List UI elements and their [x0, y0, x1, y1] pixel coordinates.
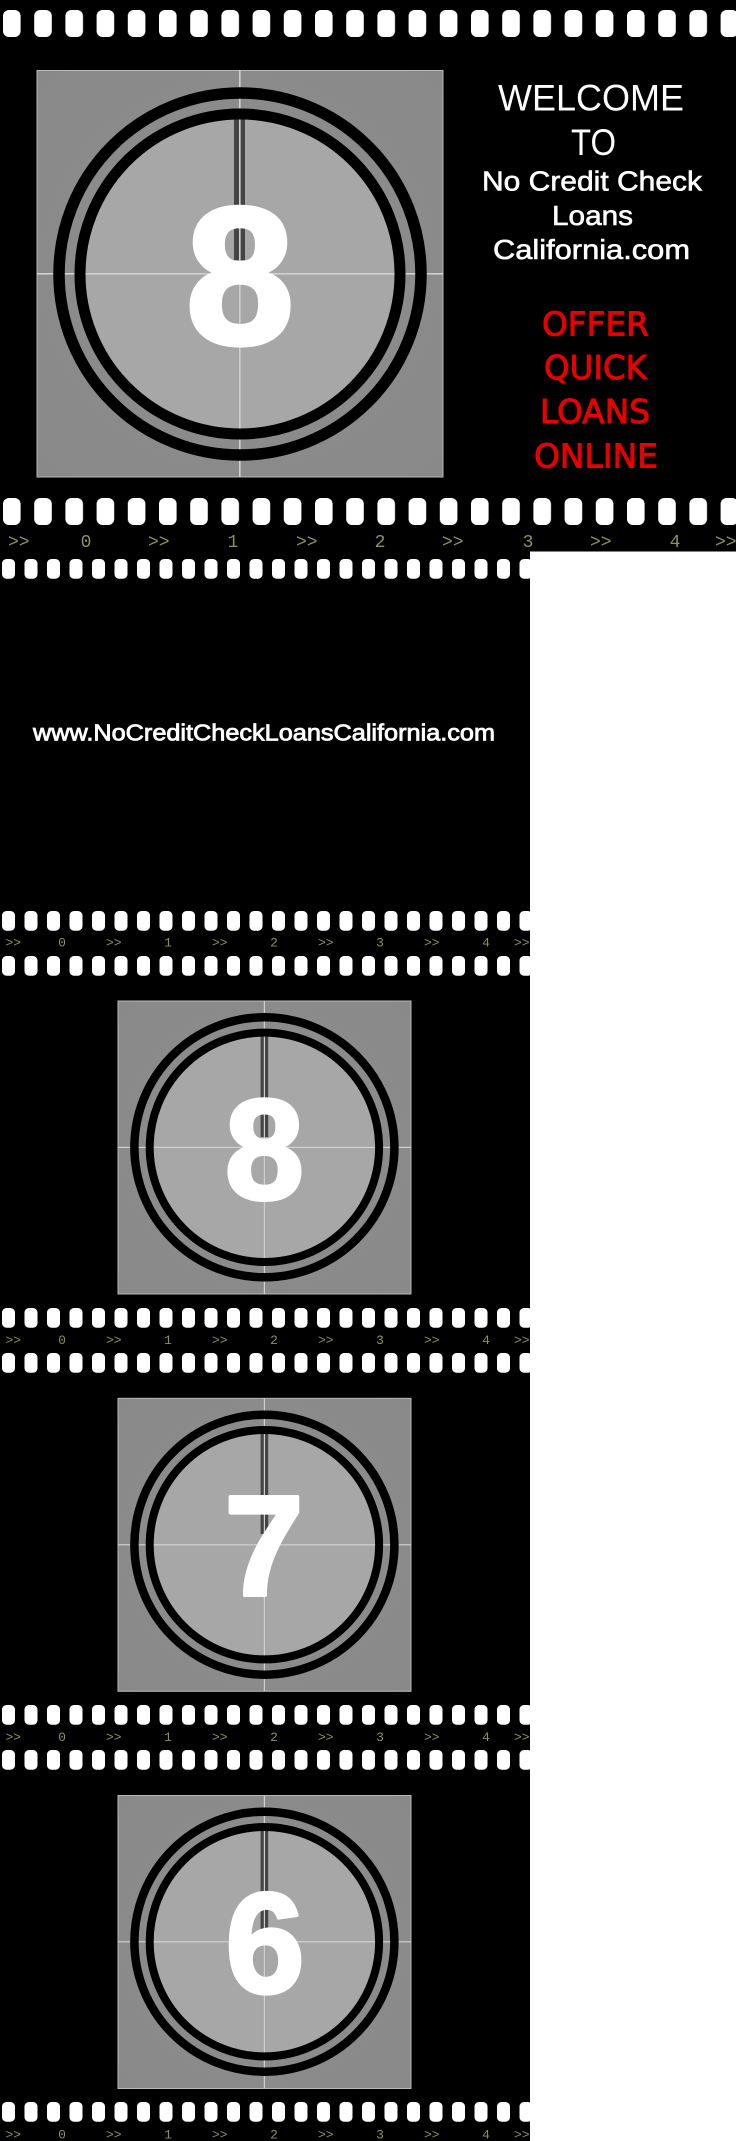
film strip: holes below ruler, frame 8 [0, 956, 530, 976]
red tagline: OFFER [542, 305, 649, 344]
ruler row: above frame 6: >> [318, 1730, 334, 1745]
film strip: holes above frame 7 [0, 1353, 530, 1373]
ruler row: above frame 8 [6, 936, 530, 950]
ruler row: top: >> [715, 533, 736, 553]
ruler row: above frame 7: 4 [482, 1333, 490, 1348]
ruler row: above frame 6: 2 [270, 1730, 278, 1745]
ruler row: above frame 6: 1 [164, 1730, 172, 1745]
ruler row: above frame 8: >> [514, 936, 530, 950]
ruler row: above frame 8: 1 [164, 936, 172, 950]
ruler row: above frame 8: >> [6, 936, 21, 950]
ruler row: above frame 7: >> [424, 1333, 440, 1348]
ruler row: above frame 7: >> [106, 1333, 122, 1348]
countdown dial: frame 7: 7 [224, 1467, 304, 1626]
red tagline: ONLINE [534, 437, 658, 476]
ruler row: above frame 7: >> [318, 1333, 334, 1348]
ruler row: above frame 7: 3 [376, 1333, 384, 1348]
ruler row: above frame 8: >> [106, 936, 122, 950]
ruler row: above frame 6: >> [6, 1730, 21, 1745]
ruler row: top: >> [442, 533, 464, 553]
welcome heading [482, 78, 702, 265]
ruler row: above frame 8: 2 [270, 936, 278, 950]
website address: www.NoCreditCheckLoansCalifornia.com [32, 720, 495, 746]
ruler row: above frame 6: 4 [482, 1730, 490, 1745]
ruler row: above frame 7: 0 [58, 1333, 66, 1348]
ruler row: above frame 8: 3 [376, 936, 384, 950]
ruler row: above frame 7 [6, 1333, 530, 1348]
film strip: bottom holes [0, 2102, 530, 2122]
film strip: holes above frame 8 [0, 911, 530, 931]
ruler row: top [8, 533, 736, 553]
countdown dial: frame 8: 8 [225, 1071, 304, 1230]
film strip: holes below frame 7 [0, 1705, 530, 1725]
ruler row: top: 0 [81, 533, 91, 553]
ruler row: above frame 6: >> [424, 1730, 440, 1745]
ruler row: top: >> [148, 533, 170, 553]
ruler row: above frame 6: 3 [376, 1730, 384, 1745]
ruler row: top: >> [296, 533, 318, 553]
ruler row: above frame 6: 0 [58, 1730, 66, 1745]
countdown dial: large 8: 8 [186, 167, 294, 385]
countdown dial: frame 6 [118, 1796, 411, 2088]
ruler row: above frame 8: >> [212, 936, 228, 950]
red tagline [534, 305, 658, 476]
ruler row: bottom [6, 2128, 530, 2141]
film strip: holes below frame 8 [0, 1308, 530, 1328]
ruler row: above frame 8: 4 [482, 936, 490, 950]
countdown dial: frame 8 [118, 1001, 411, 1294]
ruler row: top: 2 [375, 533, 385, 553]
ruler row: above frame 6 [6, 1730, 530, 1745]
countdown dial: frame 6: 6 [225, 1864, 305, 2024]
ruler row: above frame 7: >> [514, 1333, 530, 1348]
welcome heading: TO [571, 122, 616, 163]
ruler row: above frame 6: >> [514, 1730, 530, 1745]
ruler row: above frame 6: >> [106, 1730, 122, 1745]
welcome heading: No Credit Check [482, 166, 702, 197]
film strip: top sprocket holes [0, 10, 736, 37]
ruler row: top: 4 [670, 533, 680, 553]
ruler row: above frame 7: 1 [164, 1333, 172, 1348]
ruler row: above frame 8: 0 [58, 936, 66, 950]
film strip: holes above frame 6 [0, 1750, 530, 1770]
ruler row: top: >> [8, 533, 30, 553]
welcome heading: California.com [493, 234, 690, 265]
film strip: second sprocket holes [0, 498, 736, 525]
countdown dial: frame 7 [118, 1398, 411, 1691]
red tagline: QUICK [544, 348, 648, 387]
film strip: narrow sprocket holes [0, 559, 530, 579]
ruler row: top: 3 [523, 533, 533, 553]
ruler row: top: 1 [228, 533, 238, 553]
welcome heading: Loans [552, 200, 633, 231]
ruler row: above frame 6: >> [212, 1730, 228, 1745]
ruler row: top: >> [590, 533, 612, 553]
ruler row: above frame 7: >> [6, 1333, 21, 1348]
white blank area on right [530, 552, 736, 2141]
ruler row: above frame 7: >> [212, 1333, 228, 1348]
red tagline: LOANS [540, 392, 650, 431]
ruler row: above frame 8: >> [318, 936, 334, 950]
ruler row: above frame 8: >> [424, 936, 440, 950]
countdown dial: large 8 [37, 70, 443, 477]
ruler row: above frame 7: 2 [270, 1333, 278, 1348]
welcome heading: WELCOME [498, 78, 684, 119]
